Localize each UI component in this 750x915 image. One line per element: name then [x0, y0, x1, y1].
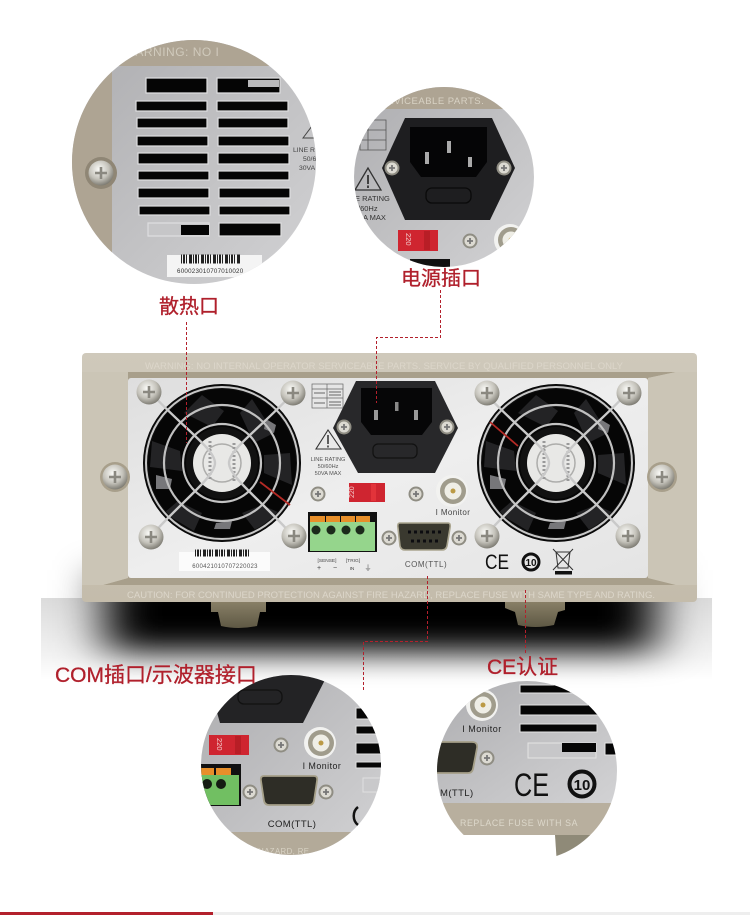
warning triangle: [316, 430, 341, 449]
beige frame: [385, 87, 503, 109]
red voltage switch: [349, 483, 385, 502]
sense and trig labels: [SENSE]: [318, 558, 336, 564]
red voltage switch: 220: [349, 486, 356, 498]
rating fragment: LINE R: [293, 147, 315, 154]
line rating text: 50/60Hz: [318, 464, 339, 470]
label: COM and oscilloscope port: COM插口/示波器接口: [55, 664, 257, 687]
footer rule: [0, 912, 750, 915]
fuse table: [312, 384, 343, 408]
barcode: [167, 255, 262, 277]
rating fragment: 30VA: [299, 165, 316, 172]
beige frame: [231, 832, 351, 855]
RoHS 10 mark: [570, 772, 594, 796]
socket module bottom: [217, 675, 324, 723]
label: CE certification: CE认证: [487, 656, 558, 679]
caution text on bezel: CAUTION: FOR CONTINUED PROTECTION AGAINST FIRE HAZARD, REPLACE FUSE WITH SAME TYPE AND RATING.: [127, 590, 655, 601]
sense and trig labels: ⏚: [364, 564, 372, 572]
I Monitor label: I Monitor: [436, 508, 470, 517]
sense and trig labels: IN: [350, 566, 355, 572]
fuse table: [360, 120, 386, 150]
CE fragment: [354, 807, 358, 825]
serial port fragment: [430, 742, 494, 773]
beige frame: [437, 803, 617, 835]
BNC connector: [466, 689, 498, 721]
COM label fragment: M(TTL): [440, 788, 474, 799]
voltage switch: [398, 230, 438, 251]
sense and trig labels: [TRIG]: [346, 558, 360, 564]
I Monitor label: I Monitor: [462, 724, 502, 734]
ground screws: [310, 486, 424, 502]
sense and trig labels: +: [317, 565, 321, 572]
beige bezel: [82, 353, 697, 602]
RoHS 10 mark: [523, 554, 539, 570]
rating fragment: E RATING: [355, 194, 390, 203]
WEEE bin mark: [553, 549, 573, 574]
serial barcode: 600421010707220023: [192, 564, 258, 570]
rubber feet: [211, 601, 565, 628]
BNC connector: [304, 727, 336, 759]
serial barcode: [179, 552, 270, 571]
frame text: RVICEABLE PARTS.: [387, 96, 484, 107]
detail circle: power socket: [354, 87, 534, 269]
COM(TTL) label: COM(TTL): [268, 819, 316, 830]
device shadow: [41, 570, 712, 680]
rubber foot: [555, 835, 590, 856]
line rating text: 50VA MAX: [315, 471, 342, 477]
voltage switch: [209, 735, 249, 755]
COM(TTL) label: COM(TTL): [405, 560, 447, 569]
callout line: CE mark: [524, 590, 526, 654]
frame text: RD, REPLACE FUSE WITH SA: [440, 818, 578, 828]
BNC connector: [436, 475, 468, 507]
callout line: COM port: [364, 576, 428, 692]
beige frame: [72, 40, 270, 252]
RoHS 10 mark: 10: [574, 777, 590, 794]
detail circle: CE mark: [437, 681, 617, 856]
voltage switch: 220: [215, 738, 224, 751]
green terminal block: [308, 512, 377, 552]
warning text on bezel: WARNING: NO INTERNAL OPERATOR SERVICEABLE PARTS. SERVICE BY QUALIFIED PERSONNEL ONLY: [145, 361, 624, 372]
detail circle: COM and BNC: [201, 670, 388, 856]
label: power socket: 电源插口: [401, 267, 481, 290]
brushed metal plate: [128, 378, 648, 578]
voltage switch: 220: [404, 233, 413, 246]
callout line: heat vent: [186, 322, 188, 443]
barcode: 600023010707010020: [177, 268, 244, 275]
right cooling fan: [477, 384, 635, 542]
terminal block: [201, 764, 241, 806]
warning triangle: [355, 168, 381, 190]
screw and BNC: [410, 224, 519, 267]
I Monitor label: I Monitor: [303, 761, 341, 771]
vent slots: [356, 708, 381, 792]
left cooling fan: [143, 384, 301, 542]
rating fragment: /60Hz: [358, 204, 378, 213]
side screws: [100, 462, 677, 492]
frame warning text: WARNING: NO I: [124, 45, 219, 59]
line rating text: LINE RATING: [311, 457, 345, 463]
CE mark: CE: [485, 551, 509, 574]
corner screws: [136, 380, 642, 550]
rating fragment: A MAX: [363, 213, 386, 222]
serial port: [242, 776, 334, 805]
fan cable: [260, 422, 518, 505]
device rear panel: [82, 353, 697, 628]
label: heat vent: 散热口: [159, 295, 219, 318]
vent slots: [520, 685, 619, 758]
CE mark: CE: [514, 767, 549, 803]
rating fragment: 50/6: [303, 156, 316, 163]
mounting screw: [85, 157, 117, 189]
sense and trig labels: −: [333, 565, 337, 572]
callout line: power socket: [376, 290, 440, 403]
socket module: [382, 118, 515, 220]
COM serial port: [382, 523, 466, 550]
frame text: E HAZARD, RE: [250, 847, 309, 856]
ground screw: [274, 738, 288, 752]
vent slots: [136, 78, 290, 236]
power inlet module: [333, 381, 458, 473]
detail circle: heat vent: [72, 40, 316, 285]
